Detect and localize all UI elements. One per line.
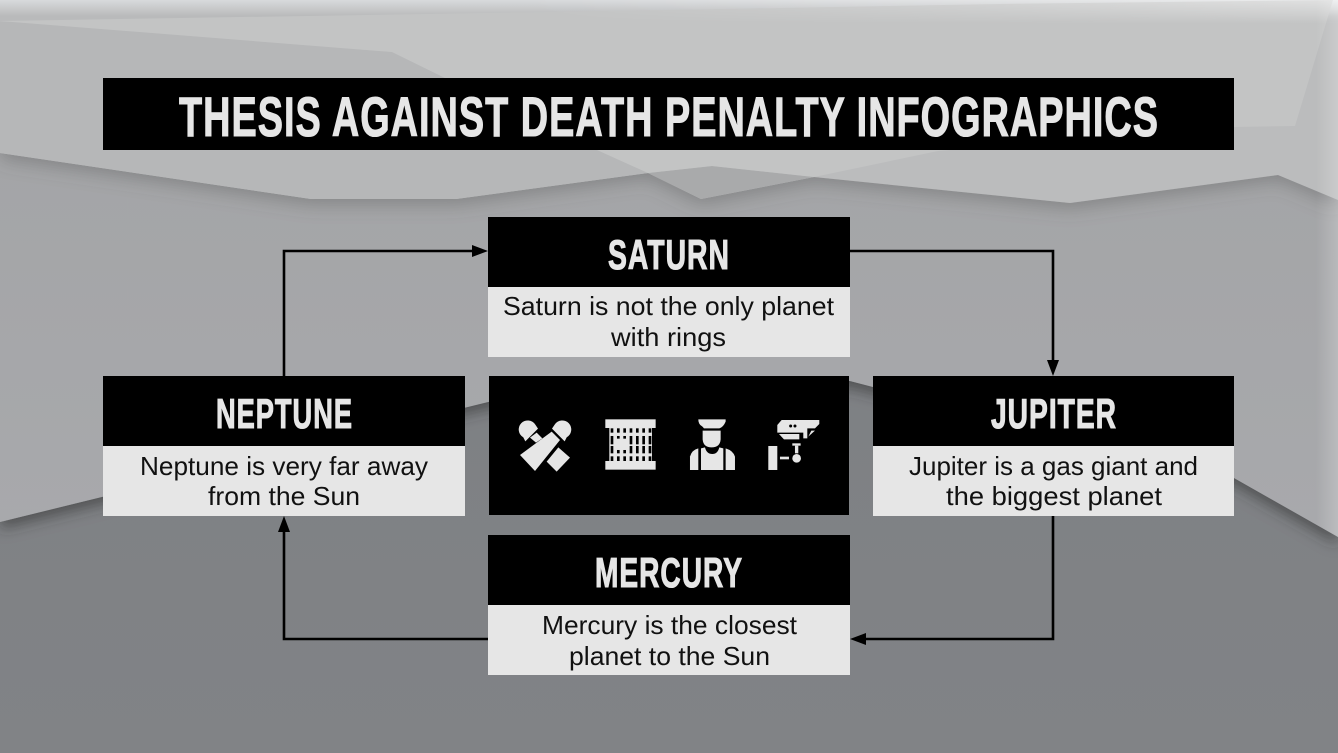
panel: central icons — [489, 376, 849, 515]
icon: security camera — [768, 420, 819, 470]
text: Neptune description: from the Sun — [208, 481, 360, 511]
text: Jupiter description: the biggest planet — [946, 481, 1163, 511]
text: Mercury description: Mercury is the closest — [542, 610, 798, 640]
text: Saturn description — [503, 291, 835, 352]
icon: executioner figure — [690, 419, 735, 470]
text: Neptune description — [140, 451, 428, 511]
arrow: Mercury to Neptune — [278, 516, 488, 639]
text: Mercury description: planet to the Sun — [569, 641, 770, 671]
panel: Jupiter — [873, 376, 1234, 516]
arrow: Saturn to Jupiter — [850, 251, 1059, 376]
heading: Jupiter: JUPITER — [991, 390, 1117, 437]
panel: Neptune — [103, 376, 465, 516]
text: Jupiter description — [909, 451, 1198, 511]
text: Jupiter description: Jupiter is a gas giant and — [909, 451, 1198, 481]
text: Mercury description — [542, 610, 798, 671]
arrow: Jupiter to Mercury — [850, 515, 1053, 645]
text: Neptune description: Neptune is very far away — [140, 451, 428, 481]
heading: Mercury: MERCURY — [595, 549, 743, 596]
icon: prison cell — [605, 419, 656, 470]
text: Saturn description: Saturn is not the only planet — [503, 291, 835, 321]
panel: Saturn — [488, 217, 850, 357]
heading: Neptune: NEPTUNE — [216, 390, 353, 437]
arrow: Neptune to Saturn — [284, 245, 488, 376]
icon: crossed tools — [519, 420, 571, 472]
title banner — [103, 78, 1234, 150]
text: Saturn description: with rings — [610, 322, 726, 352]
heading: Saturn: SATURN — [608, 231, 730, 278]
panel: Mercury — [488, 535, 850, 675]
background: layered grey wall — [0, 0, 1338, 544]
